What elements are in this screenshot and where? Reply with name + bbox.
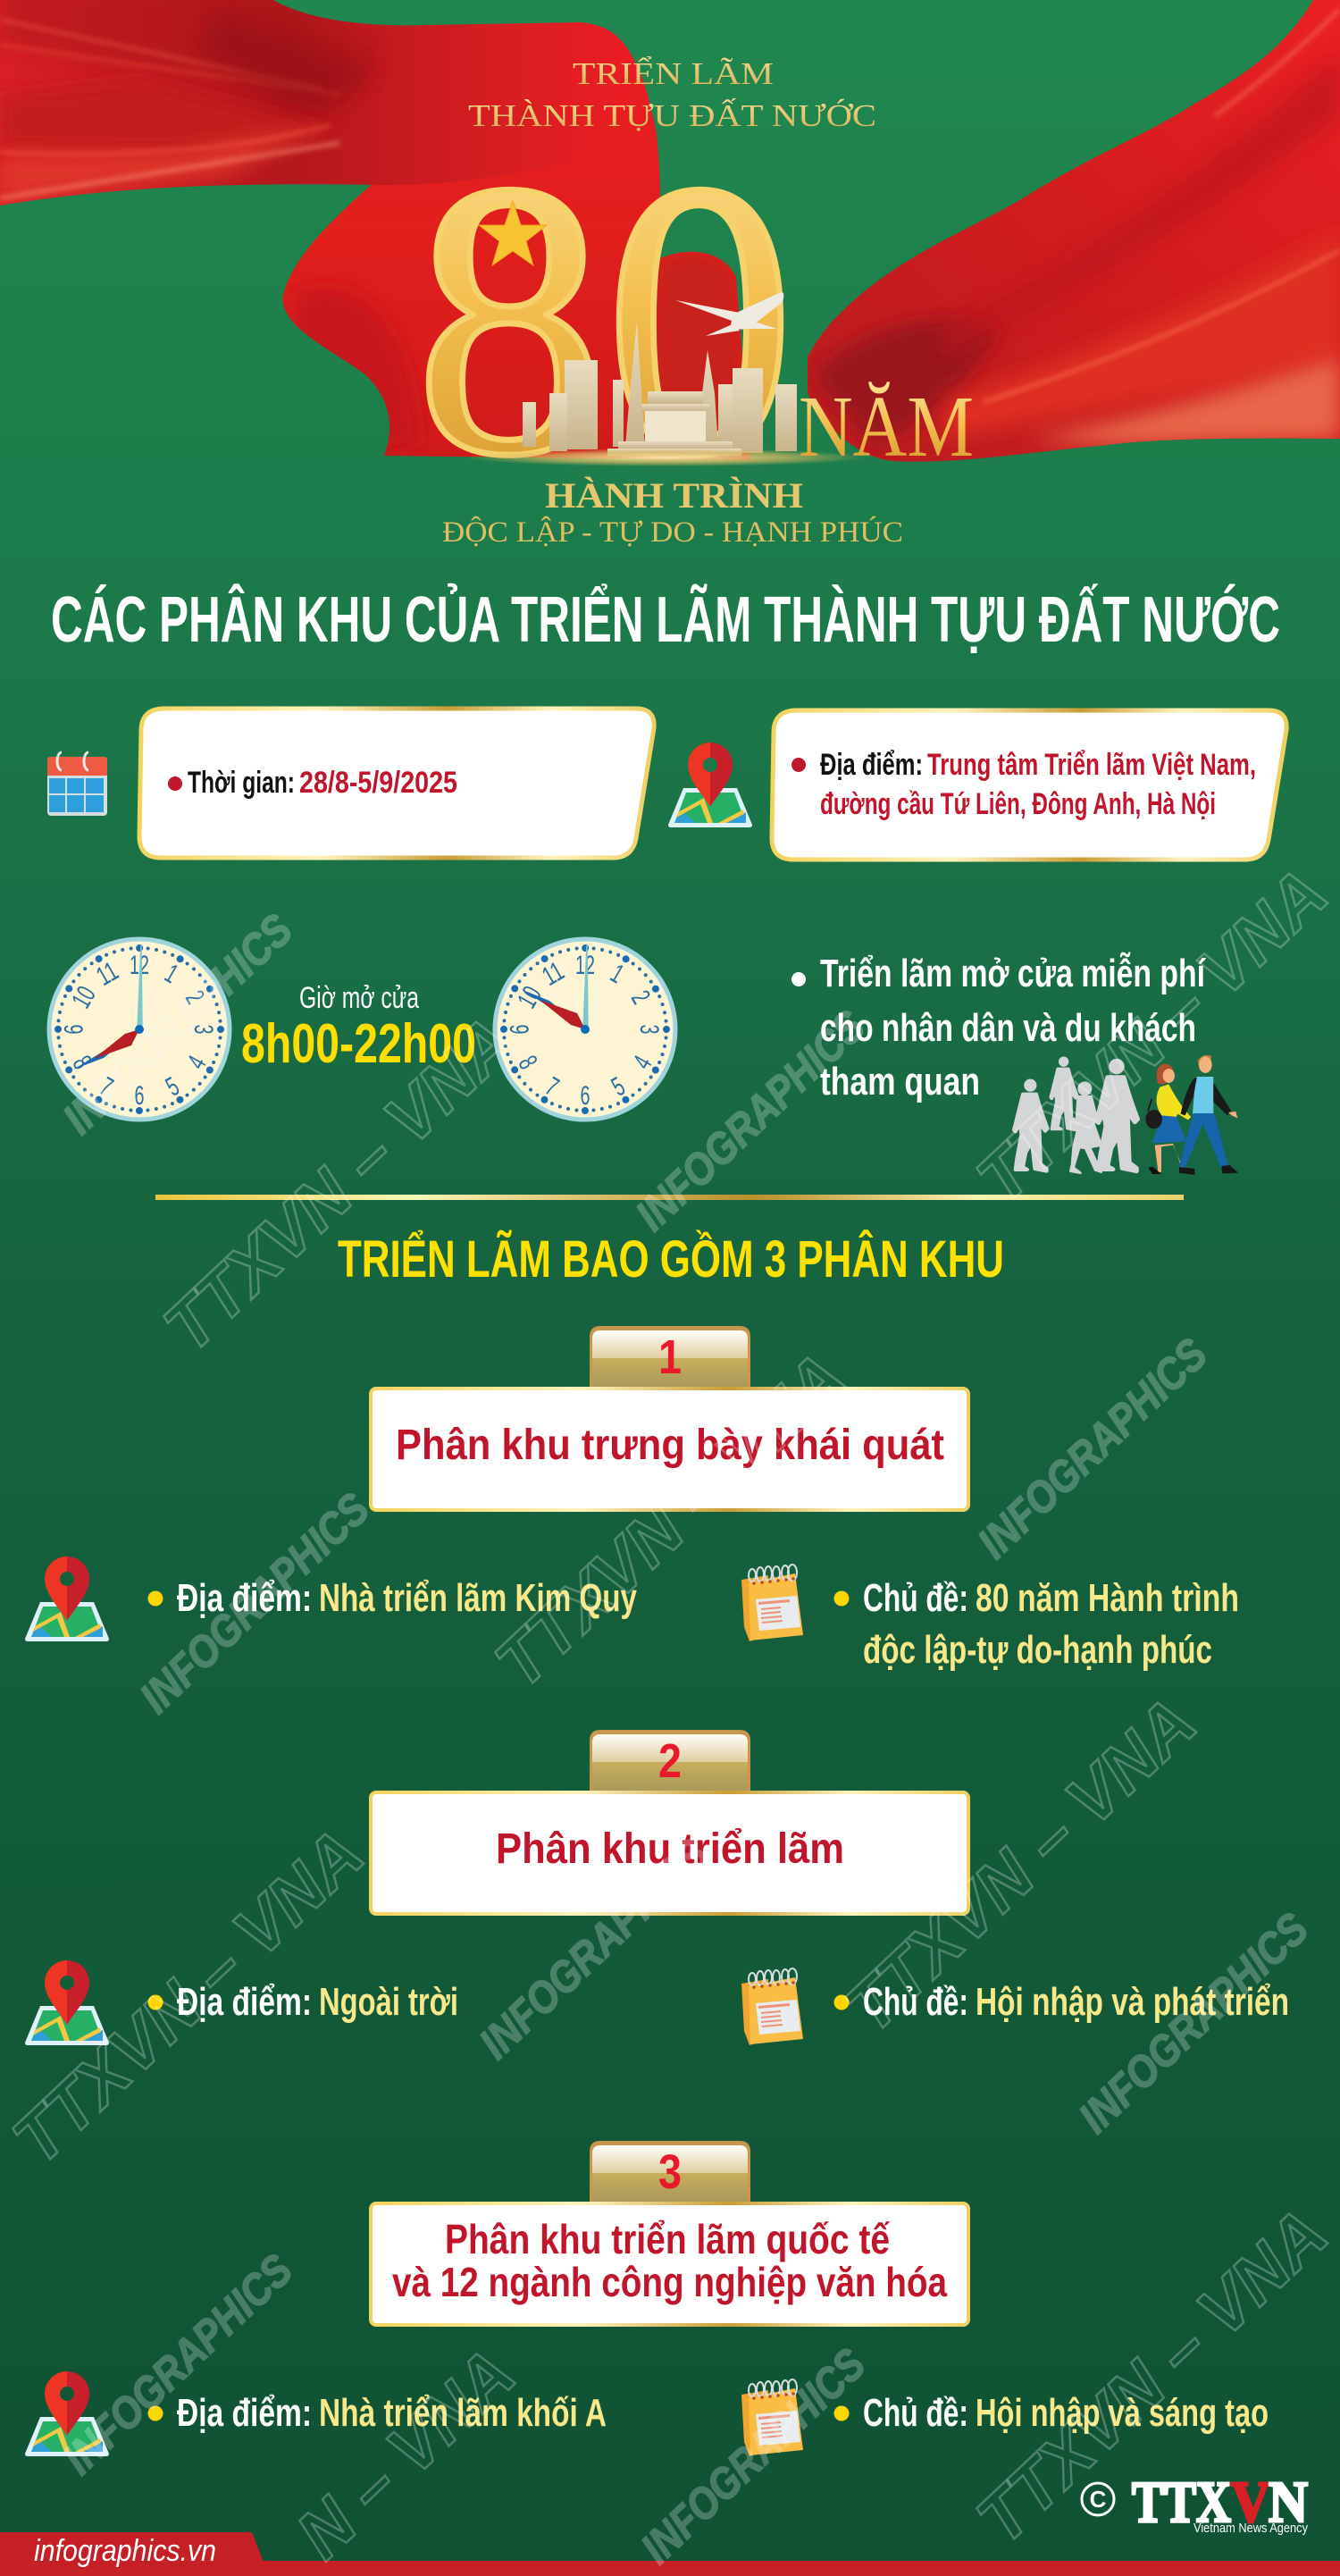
bullet — [168, 776, 182, 791]
opening hours: Giờ mở cửa — [299, 981, 419, 1015]
free admission note: cho nhân dân và du khách — [820, 1006, 1196, 1050]
time text — [188, 766, 457, 800]
number tab 2 — [590, 1730, 750, 1791]
free admission note: Triển lãm mở cửa miễn phí — [820, 951, 1206, 995]
watermarks: INFOGRAPHICS — [632, 2339, 875, 2573]
clock: 10 o'clock: 12 — [575, 951, 595, 980]
zone 3 — [25, 2141, 1269, 2456]
watermarks: INFOGRAPHICS — [130, 1483, 379, 1723]
zone 1 theme: 80 năm Hành trình — [976, 1576, 1239, 1620]
free admission note: tham quan — [820, 1060, 980, 1103]
clock: 10 o'clock: 8 — [512, 1051, 543, 1074]
zone 3 location — [148, 2391, 607, 2435]
zone 2 theme: Chủ đề: — [863, 1980, 968, 2024]
clock: 10 o'clock: 11 — [537, 956, 569, 992]
icon: location — [25, 1960, 109, 2045]
plane — [675, 292, 783, 336]
watermarks — [0, 853, 1340, 2573]
zone 1 title: Phân khu trưng bày khái quát — [396, 1422, 944, 1469]
venue text — [820, 748, 1256, 821]
zone 2 theme — [834, 1980, 1289, 2024]
time text: 28/8-5/9/2025 — [299, 766, 457, 800]
free admission note — [791, 951, 1206, 1103]
clock: 10 o'clock: 1 — [606, 959, 629, 989]
number tab 1: 1 — [658, 1330, 682, 1384]
icon: calendar — [47, 752, 107, 816]
zone 1 location: Nhà triển lãm Kim Quy — [319, 1576, 637, 1620]
star — [479, 201, 547, 265]
clock: 10 o'clock: 10 — [512, 981, 548, 1013]
mausoleum — [648, 391, 703, 404]
agency logo: N — [1269, 2470, 1308, 2535]
zone 1 location — [148, 1576, 637, 1620]
zone 2 location: Ngoài trời — [319, 1980, 458, 2024]
icon: notebook — [741, 1968, 803, 2045]
agency logo: V — [1231, 2470, 1270, 2535]
80 years emblem — [415, 102, 974, 537]
agency logo — [1082, 2470, 1308, 2536]
zone 1 location: Địa điểm: — [177, 1576, 312, 1620]
zone 2 location — [148, 1980, 458, 2024]
clock: 8 o'clock: 8 — [66, 1051, 97, 1074]
opening hours — [241, 981, 476, 1075]
icon: location — [25, 2371, 109, 2456]
opening hours: 8h00-22h00 — [241, 1013, 476, 1075]
city skyline — [523, 322, 797, 456]
icon: location map — [668, 743, 752, 827]
red flag ribbons — [0, 0, 1340, 462]
clock: 8 o'clock: 9 — [58, 1024, 88, 1035]
clock: 8 o'clock: 11 — [91, 956, 123, 992]
clock: 8 o'clock: 10 — [66, 981, 102, 1013]
bullet — [791, 758, 806, 772]
icon: location — [25, 1557, 109, 1641]
clock: 10 o'clock — [495, 939, 675, 1120]
journey subtitle: HÀNH TRÌNH — [545, 475, 803, 516]
clock: 8 o'clock: 7 — [95, 1071, 118, 1103]
event name: THÀNH TỰU ĐẤT NƯỚC — [468, 97, 876, 133]
event name: TRIỂN LÃM — [573, 55, 774, 91]
clock: 8 o'clock: 4 — [181, 1051, 213, 1074]
clock: 8 o'clock: 1 — [160, 959, 183, 989]
zone 3 title — [371, 2203, 968, 2325]
watermarks: TTXVN – VNA — [0, 1814, 378, 2178]
number tab 2: 2 — [658, 1734, 682, 1788]
clock: 10 o'clock: 2 — [625, 986, 656, 1009]
watermarks: INFOGRAPHICS — [54, 2245, 302, 2484]
footer bar — [0, 2532, 1340, 2576]
heading: three zones: TRIỂN LÃM BAO GỒM 3 PHÂN KHU — [338, 1230, 1004, 1288]
agency logo: TTX — [1132, 2470, 1231, 2535]
journey subtitle — [442, 475, 903, 549]
zone 1 theme: Chủ đề: — [863, 1576, 968, 1620]
journey subtitle: ĐỘC LẬP - TỰ DO - HẠNH PHÚC — [442, 515, 903, 549]
number 80: 80 — [415, 102, 795, 537]
zone 3 title: Phân khu triển lãm quốc tế — [445, 2216, 890, 2262]
zone 1 theme: độc lập-tự do-hạnh phúc — [863, 1628, 1212, 1672]
panel: venue — [772, 710, 1286, 860]
zone 3 location: Địa điểm: — [177, 2391, 312, 2435]
icon: visitors — [1014, 1055, 1238, 1175]
agency logo: C — [1090, 2486, 1107, 2513]
zone 3 theme: Chủ đề: — [863, 2391, 968, 2435]
clock: 10 o'clock: 9 — [504, 1024, 533, 1035]
clock: 10 o'clock: 7 — [540, 1071, 564, 1103]
panel: time — [139, 709, 654, 858]
section divider — [155, 1195, 1184, 1200]
zone 1 title — [371, 1389, 968, 1510]
number tab 3 — [590, 2141, 750, 2203]
watermarks: INFOGRAPHICS — [54, 904, 302, 1144]
zone 1 — [25, 1326, 1239, 1672]
zone 3 theme — [834, 2391, 1269, 2435]
ground glow — [465, 449, 867, 466]
zone 2 — [25, 1730, 1289, 2045]
clock: 8 o'clock: 3 — [188, 1024, 218, 1035]
clock: 8 o'clock: 2 — [180, 986, 210, 1009]
number tab 3: 3 — [658, 2145, 682, 2199]
clock: 8 o'clock — [49, 939, 230, 1120]
clock: 10 o'clock: 5 — [607, 1071, 630, 1103]
number tab 1 — [590, 1326, 750, 1388]
watermarks: TTXVN – VNA — [961, 853, 1340, 1218]
clock: 10 o'clock: 3 — [634, 1024, 664, 1035]
watermarks: TTXVN – VNA — [480, 1338, 860, 1702]
zone 3 location: Nhà triển lãm khối A — [319, 2391, 607, 2435]
watermarks: TTXVN – VNA — [830, 1682, 1210, 2047]
clock: 8 o'clock: 12 — [130, 951, 149, 980]
watermarks: INFOGRAPHICS — [470, 1829, 718, 2068]
watermarks: TTXVN – VNA — [148, 1002, 529, 1366]
icon: notebook — [741, 1565, 803, 1641]
watermarks: INFOGRAPHICS — [968, 1329, 1217, 1568]
icon: notebook — [741, 2379, 803, 2456]
footer bar: infographics.vn — [34, 2534, 216, 2568]
clock: 8 o'clock: 6 — [134, 1081, 145, 1111]
clock: 10 o'clock: 4 — [627, 1051, 658, 1074]
NĂM label: NĂM — [799, 379, 974, 475]
clock: 10 o'clock: 6 — [581, 1081, 590, 1111]
venue text: Địa điểm: — [820, 748, 923, 782]
watermarks: N – VNA — [281, 2334, 530, 2573]
agency logo: Vietnam News Agency — [1193, 2521, 1308, 2536]
zone 2 title: Phân khu triển lãm — [496, 1825, 844, 1873]
event name — [468, 55, 876, 133]
zone 2 location: Địa điểm: — [177, 1980, 312, 2024]
clock: 8 o'clock: 5 — [161, 1071, 184, 1103]
watermarks: INFOGRAPHICS — [626, 1001, 875, 1240]
zone 3 title: và 12 ngành công nghiệp văn hóa — [392, 2259, 947, 2305]
time text: Thời gian: — [188, 766, 295, 800]
zone 1 theme — [834, 1576, 1239, 1672]
watermarks: TTXVN – VNA — [961, 2194, 1340, 2558]
zone 2 title — [371, 1792, 968, 1914]
